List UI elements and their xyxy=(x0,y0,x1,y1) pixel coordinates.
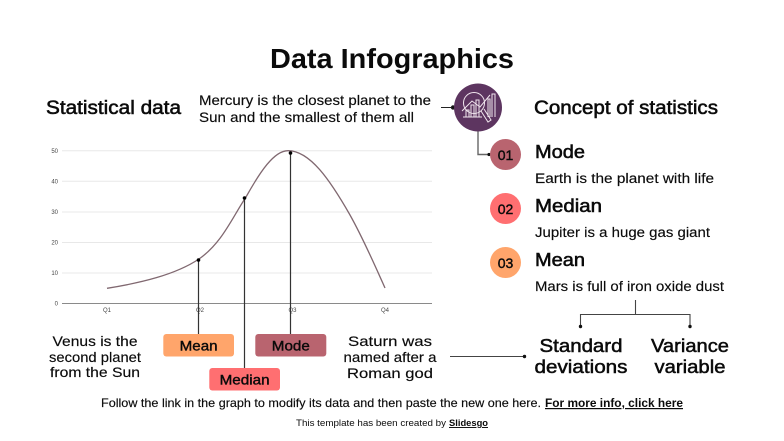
label: median: Median xyxy=(220,372,270,388)
label: mode: Mode xyxy=(272,338,310,354)
pointer: mean xyxy=(197,258,200,334)
label: mean: Mean xyxy=(180,338,218,354)
item 01 mode: 01 xyxy=(498,147,513,163)
heading: statistical data: Statistical data xyxy=(46,98,181,119)
line chart: 20 xyxy=(51,240,59,246)
item 01 mode: Earth is the planet with life xyxy=(535,171,714,186)
text block: standard deviations: deviations xyxy=(534,357,628,377)
text block: variance variable: variable xyxy=(654,357,726,377)
item 02 median xyxy=(490,193,710,240)
item 03 mean: Mean xyxy=(535,250,585,270)
line chart: Q3 xyxy=(288,308,297,314)
text block: venus: from the Sun xyxy=(50,364,140,380)
text block: variance variable xyxy=(651,336,729,377)
text block: saturn: Saturn was xyxy=(348,333,432,349)
text block: saturn: Roman god xyxy=(347,365,433,381)
line chart: 10 xyxy=(51,271,59,277)
item 02 median: 02 xyxy=(498,201,513,217)
icon: statistics magnifier xyxy=(454,84,502,132)
text block: venus: second planet xyxy=(49,349,141,365)
credit: This template has been created by xyxy=(296,418,446,429)
text block: mercury xyxy=(199,92,431,125)
line chart: 30 xyxy=(51,210,59,216)
pointer: median xyxy=(243,196,246,368)
line chart: Q4 xyxy=(381,308,390,314)
credit: Slidesgo xyxy=(449,418,488,429)
line chart: 50 xyxy=(51,149,59,155)
title: Data Infographics xyxy=(270,43,514,74)
text block: saturn xyxy=(344,333,437,381)
text block: venus: Venus is the xyxy=(52,333,138,349)
heading: concept of statistics: Concept of statistics xyxy=(534,98,718,119)
item 01 mode xyxy=(490,139,714,186)
item 02 median: Jupiter is a huge gas giant xyxy=(535,225,710,240)
label: median xyxy=(209,368,280,390)
pointer: mode xyxy=(289,151,292,334)
label: mean xyxy=(163,334,234,356)
item 02 median: Median xyxy=(535,196,602,216)
item 01 mode: Mode xyxy=(535,142,585,162)
item 03 mean xyxy=(490,247,724,294)
arrow: mercury to icon xyxy=(441,106,455,109)
label: mode xyxy=(255,334,326,356)
text block: venus xyxy=(49,333,141,380)
line chart: Q1 xyxy=(103,308,112,314)
connector: mean to branches xyxy=(579,300,692,328)
text block: standard deviations xyxy=(534,336,628,377)
text block: standard deviations: Standard xyxy=(540,336,622,356)
arrow: icon to 01 xyxy=(478,130,491,156)
line chart: Q2 xyxy=(196,308,205,314)
line chart xyxy=(51,149,432,314)
line chart: 0 xyxy=(55,302,59,308)
footer note: For more info, click here xyxy=(545,396,683,410)
arrow: saturn to standard deviations xyxy=(450,355,526,358)
text block: saturn: named after a xyxy=(344,349,437,365)
text block: mercury: Sun and the smallest of them all xyxy=(199,109,414,125)
line chart: 40 xyxy=(51,180,59,186)
text block: variance variable: Variance xyxy=(651,336,729,356)
item 03 mean: Mars is full of iron oxide dust xyxy=(535,279,724,294)
text block: mercury: Mercury is the closest planet to the xyxy=(199,92,431,108)
footer note: Follow the link in the graph to modify its data and then paste the new one here. xyxy=(101,396,541,410)
item 03 mean: 03 xyxy=(498,255,513,271)
